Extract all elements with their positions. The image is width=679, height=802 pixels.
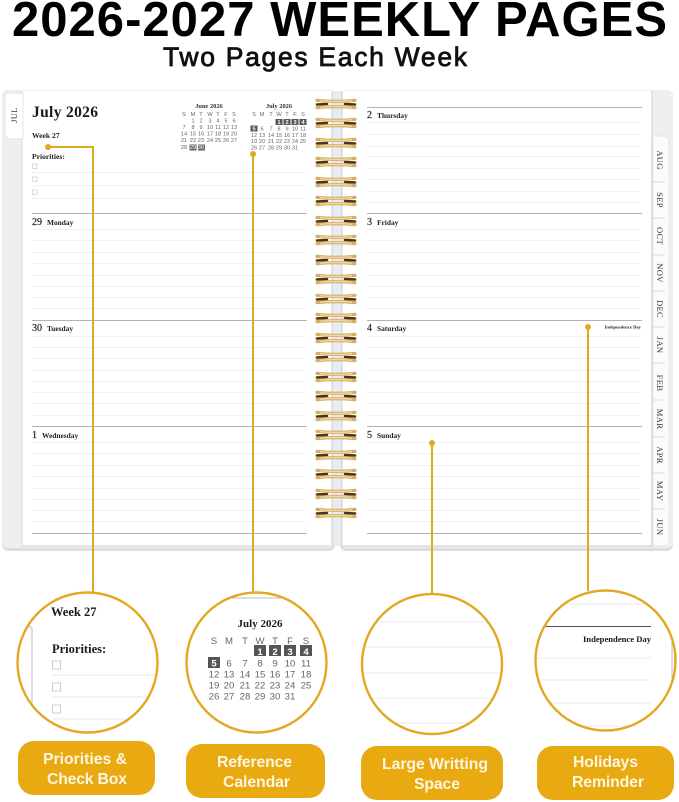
magnifier: reference calendar: 19 (209, 680, 219, 692)
mini calendar: June 2026: 10 (207, 125, 213, 131)
mini calendar: July 2026: 15 (276, 133, 282, 139)
mini calendar: June 2026: 27 (231, 138, 237, 144)
month tabs: JAN (655, 337, 665, 354)
magnifier: large writing space (360, 594, 510, 734)
mini calendar: July 2026: 16 (284, 133, 290, 139)
magnifier: reference calendar: 21 (240, 680, 250, 692)
mini calendar: June 2026: M (191, 112, 196, 118)
magnifier: reference calendar: 15 (255, 670, 265, 680)
mini calendar: June 2026: 20 (231, 132, 237, 138)
ruled lines: left page (32, 172, 307, 534)
mini calendar: July 2026: 7 (269, 126, 273, 132)
magnifier: reference calendar: 20 (224, 680, 234, 692)
mini calendar: July 2026: 1 (277, 120, 281, 126)
magnifier: reference calendar: 25 (301, 680, 311, 692)
subtitle: Two Pages Each Week (163, 42, 468, 72)
mini calendar: July 2026: 30 (284, 146, 290, 152)
mini calendar: July 2026: 8 (277, 126, 281, 132)
magnifier: reference calendar: T (242, 636, 248, 647)
mini calendar: July 2026: 27 (259, 146, 265, 152)
magnifier: reference calendar: 1 (257, 647, 263, 658)
magnifier: reference calendar: 14 (240, 670, 251, 680)
mini calendar: June 2026: 21 (181, 138, 187, 144)
connector: reference calendar (250, 151, 256, 592)
magnifier: reference calendar: S (211, 636, 217, 647)
mini calendar: June 2026: 29 (190, 145, 196, 151)
mini calendar: June 2026: 6 (232, 118, 236, 124)
mini calendar: July 2026: 29 (276, 146, 282, 152)
mini calendar: June 2026: June 2026 (195, 103, 224, 110)
mini calendar: June 2026: W (207, 112, 213, 118)
mini calendar: June 2026: S (182, 112, 186, 118)
day label: 4 Saturday: 4 Saturday (367, 323, 406, 334)
magnifier: reference calendar: F (287, 636, 293, 647)
magnifier: reference calendar: 24 (285, 680, 296, 692)
month tabs: AUG (655, 150, 665, 170)
magnifier: reference calendar: 11 (301, 658, 311, 670)
mini calendar: June 2026: 9 (199, 125, 203, 131)
label: Large Writting Space (361, 746, 503, 800)
month tabs: APR (655, 446, 665, 464)
magnifier: holidays reminder: Independence Day (583, 634, 652, 644)
magnifier: reference calendar: 13 (224, 670, 234, 680)
label: Holidays Reminder: Reminder (572, 774, 644, 791)
label: Holidays Reminder (537, 746, 674, 800)
magnifier: reference calendar: 28 (240, 692, 250, 702)
label: Holidays Reminder: Holidays (573, 754, 638, 771)
day label: 1 Wednesday: 1 Wednesday (32, 430, 78, 441)
mini calendar: June 2026: 19 (223, 132, 229, 138)
mini calendar: July 2026: 12 (251, 133, 257, 139)
mini calendar: June 2026: T (199, 112, 203, 118)
month tabs: SEP (655, 192, 665, 208)
magnifier: reference calendar: 5 (211, 658, 217, 670)
magnifier: reference calendar: 9 (272, 658, 278, 670)
magnifier: reference calendar: 6 (226, 658, 232, 670)
mini calendar: July 2026: 21 (268, 139, 274, 145)
panel: left page (5, 91, 332, 546)
magnifier: reference calendar: 10 (285, 658, 295, 670)
ruled lines: right page (367, 108, 642, 534)
priority check boxes (32, 164, 37, 194)
heading: July 2026: July 2026 (32, 104, 98, 121)
magnifier: reference calendar (186, 592, 326, 732)
label: Reference Calendar (186, 744, 325, 798)
mini calendar: June 2026: S (232, 112, 236, 118)
magnifier: reference calendar: 3 (287, 647, 293, 658)
magnifier: reference calendar: 18 (301, 670, 311, 680)
mini calendar: July 2026 (250, 103, 306, 152)
tab: JUL: JUL (9, 107, 19, 123)
connector: writing space (429, 440, 435, 594)
mini calendar: June 2026: 30 (198, 145, 204, 151)
mini calendar: July 2026: July 2026 (266, 103, 293, 110)
mini calendar: June 2026: 5 (224, 118, 228, 124)
mini calendar: June 2026: 7 (182, 125, 186, 131)
mini calendar: July 2026: 10 (292, 126, 298, 132)
mini calendar: July 2026: S (252, 112, 256, 118)
mini calendar: June 2026: 22 (190, 138, 196, 144)
mini calendar: June 2026: 24 (207, 138, 213, 144)
spiral binding (317, 91, 355, 546)
magnifier: reference calendar: 4 (303, 647, 309, 658)
day label: 5 Sunday: 5 Sunday (367, 430, 401, 441)
mini calendar: July 2026: 4 (301, 120, 305, 126)
mini calendar: June 2026: F (224, 112, 228, 118)
day label: 3 Friday: 3 Friday (367, 217, 399, 228)
month tabs: NOV (655, 263, 665, 283)
magnifier: reference calendar: T (272, 636, 278, 647)
mini calendar: July 2026: T (285, 112, 289, 118)
magnifier: reference calendar: 7 (242, 658, 248, 670)
month tabs: MAR (655, 409, 665, 429)
magnifier: priorities and check box (18, 592, 160, 732)
label: Priorities & Check Box (18, 741, 155, 795)
connector: priorities (45, 144, 93, 592)
magnifier: reference calendar: M (225, 636, 233, 647)
month tabs: FEB (655, 375, 665, 391)
label: Priorities & Check Box: Check Box (47, 771, 127, 788)
mini calendar: July 2026: S (301, 112, 305, 118)
magnifier: priorities and check box: Priorities: (52, 642, 106, 656)
mini calendar: July 2026: 25 (300, 139, 306, 145)
mini calendar: June 2026: 13 (231, 125, 237, 131)
mini calendar: June 2026: 1 (191, 118, 195, 124)
mini calendar: June 2026: 17 (207, 132, 213, 138)
mini calendar: July 2026: 3 (293, 120, 297, 126)
mini calendar: July 2026: 17 (292, 133, 298, 139)
mini calendar: July 2026: 26 (251, 146, 257, 152)
magnifier: reference calendar: 30 (270, 692, 280, 702)
magnifier: reference calendar: July 2026 (238, 618, 283, 630)
mini calendar: June 2026: 26 (223, 138, 229, 144)
mini calendar: July 2026: 11 (300, 126, 306, 132)
mini calendar: July 2026: W (276, 112, 282, 118)
magnifier: reference calendar: 8 (257, 658, 263, 670)
mini calendar: June 2026: 8 (191, 125, 195, 131)
month tabs: DEC (655, 300, 665, 318)
mini calendar: July 2026: 6 (260, 126, 264, 132)
mini calendar: July 2026: 14 (268, 133, 274, 139)
mini calendar: July 2026: 23 (284, 139, 290, 145)
month tabs: JUN (655, 519, 665, 536)
text: Priorities: Priorities: (32, 152, 65, 161)
mini calendar: July 2026: 18 (300, 133, 306, 139)
mini calendar: July 2026: 20 (259, 139, 265, 145)
mini calendar: June 2026 (181, 103, 237, 151)
connector: holidays (585, 324, 591, 591)
mini calendar: June 2026: 28 (181, 145, 187, 151)
mini calendar: July 2026: 9 (285, 126, 289, 132)
month tabs: MAY (655, 481, 665, 501)
month tabs: OCT (655, 227, 665, 245)
mini calendar: June 2026: T (216, 112, 220, 118)
panel: planner cover (2, 90, 673, 551)
mini calendar: June 2026: 15 (190, 132, 196, 138)
text: Week 27: Week 27 (32, 131, 60, 140)
day label: 29 Monday: 29 Monday (32, 217, 74, 228)
magnifier: reference calendar: 16 (270, 670, 280, 680)
mini calendar: June 2026: 2 (199, 118, 203, 124)
month tabs (653, 136, 669, 546)
label: Priorities & Check Box: Priorities & (43, 751, 127, 768)
mini calendar: July 2026: F (293, 112, 297, 118)
magnifier: reference calendar: 29 (255, 692, 265, 702)
mini calendar: June 2026: 16 (198, 132, 204, 138)
mini calendar: June 2026: 18 (215, 132, 221, 138)
magnifier: reference calendar: 31 (285, 692, 295, 702)
mini calendar: July 2026: 13 (259, 133, 265, 139)
mini calendar: June 2026: 25 (215, 138, 221, 144)
magnifier: reference calendar: 23 (270, 680, 280, 692)
mini calendar: June 2026: 14 (181, 132, 187, 138)
day label: 2 Thursday: 2 Thursday (367, 110, 408, 121)
mini calendar: July 2026: 24 (292, 139, 298, 145)
magnifier: priorities and check box: Week 27 (51, 605, 96, 619)
mini calendar: July 2026: 22 (276, 139, 282, 145)
day label: 30 Tuesday: 30 Tuesday (32, 323, 73, 334)
magnifier: holidays reminder (535, 590, 676, 730)
label: Large Writting Space: Space (414, 776, 460, 793)
mini calendar: June 2026: 3 (208, 118, 212, 124)
mini calendar: July 2026: M (260, 112, 265, 118)
label: Large Writting Space: Large Writting (382, 756, 488, 773)
tab: JUL (5, 93, 23, 139)
magnifier: reference calendar: 12 (209, 670, 219, 680)
magnifier: reference calendar: 22 (255, 680, 265, 692)
magnifier: reference calendar: 17 (285, 670, 295, 680)
mini calendar: June 2026: 4 (216, 118, 220, 124)
mini calendar: June 2026: 11 (215, 125, 221, 131)
magnifier: reference calendar: 26 (209, 692, 219, 702)
mini calendar: June 2026: 12 (223, 125, 229, 131)
mini calendar: July 2026: 2 (285, 120, 289, 126)
magnifier: reference calendar: 27 (224, 692, 234, 702)
magnifier: reference calendar: S (303, 636, 309, 647)
mini calendar: July 2026: 19 (251, 139, 257, 145)
mini calendar: July 2026: 31 (292, 146, 298, 152)
panel: right page (342, 91, 652, 546)
label: Reference Calendar: Reference (217, 754, 292, 771)
mini calendar: July 2026: 28 (268, 146, 274, 152)
mini calendar: July 2026: T (269, 112, 273, 118)
holiday label: Independence Day: Independence Day (605, 324, 642, 330)
mini calendar: June 2026: 23 (198, 138, 204, 144)
magnifier: reference calendar: W (255, 636, 265, 647)
mini calendar: July 2026: 5 (252, 126, 256, 132)
label: Reference Calendar: Calendar (223, 774, 290, 791)
magnifier: reference calendar: 2 (272, 647, 278, 658)
